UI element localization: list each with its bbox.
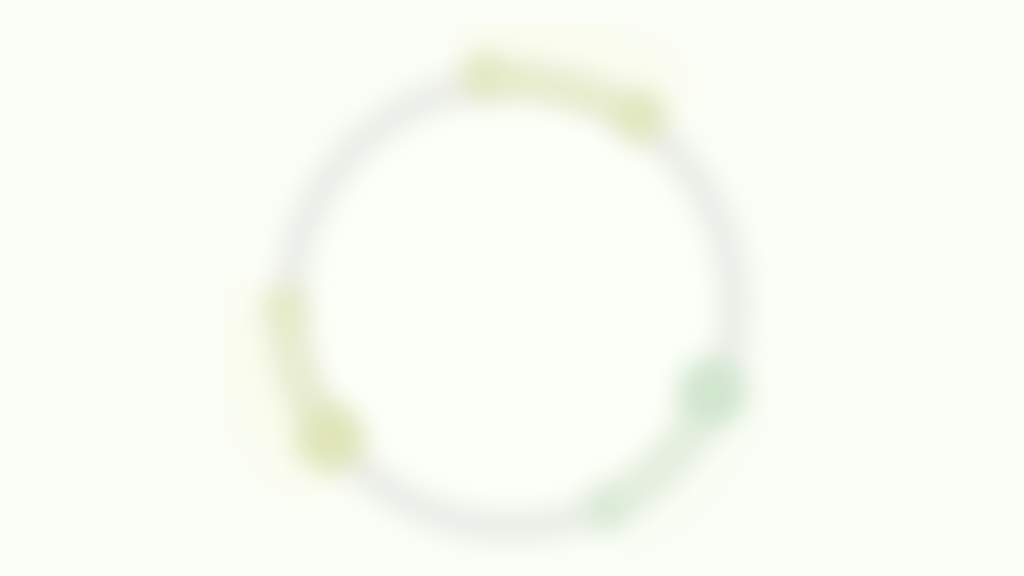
halo: top segment: [470, 49, 670, 100]
node: bottom: [586, 486, 630, 530]
node: top right: [614, 90, 666, 142]
halo: left segment: [255, 300, 320, 470]
inner disc: [327, 120, 697, 490]
segment: left olive arc: [263, 286, 364, 472]
node: top left: [461, 52, 509, 100]
segment: top olive arc: [461, 52, 666, 142]
node: left top: [263, 286, 307, 330]
segment: right green arc: [586, 358, 746, 530]
node: left bottom: [296, 404, 364, 472]
halo: right segment: [610, 380, 740, 530]
node: right: [678, 358, 746, 426]
ring: [290, 83, 734, 527]
